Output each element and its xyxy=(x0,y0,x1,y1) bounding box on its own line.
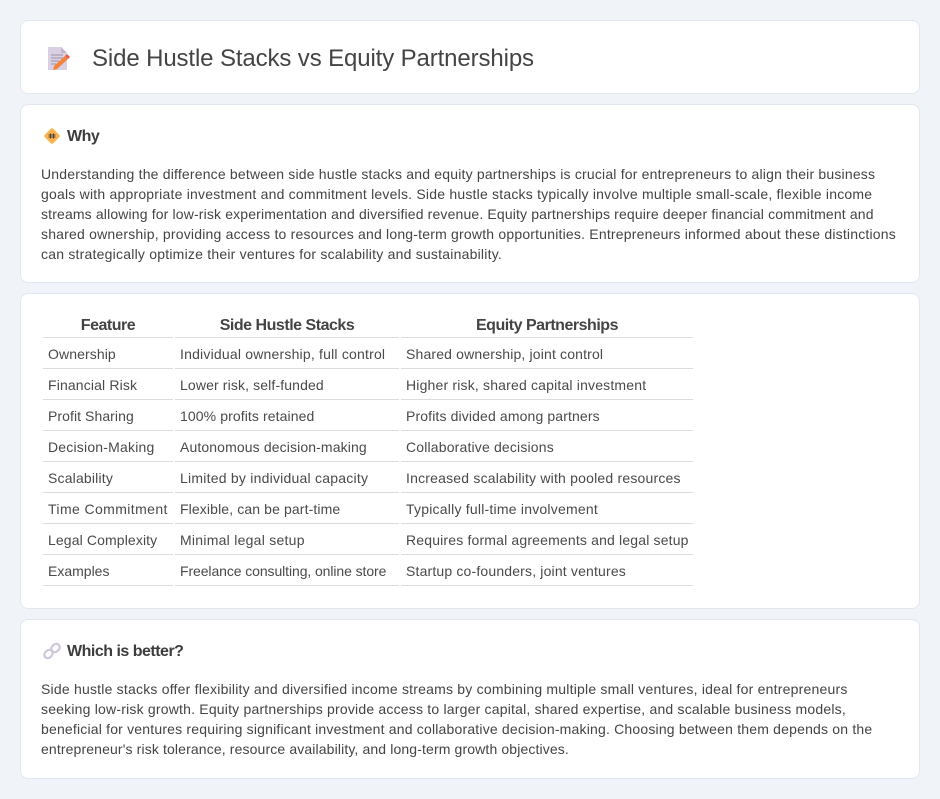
row: financial risk: Financial Risk xyxy=(48,377,137,393)
text: which is better paragraph: beneficial for ventures requiring significant investment and collaborative decision-making. Choosing between them depends on the xyxy=(41,721,872,737)
table header: side hustle stacks: Side Hustle Stacks xyxy=(220,317,354,334)
table: comparison: Increased scalability with pooled resources xyxy=(406,470,681,486)
table: comparison: Profits divided among partners xyxy=(406,408,600,424)
row: legal complexity: Legal Complexity xyxy=(48,532,157,548)
panel: header xyxy=(20,20,920,94)
panel: which is better xyxy=(20,619,920,779)
title: Side Hustle Stacks vs Equity Partnerships xyxy=(92,45,534,72)
row: profit sharing: Profit Sharing xyxy=(48,408,134,424)
row: ownership: Ownership xyxy=(48,346,116,362)
table: comparison: Freelance consulting, online store xyxy=(180,563,386,579)
text: why paragraph: can strategically optimize their ventures for scalability and sustainability. xyxy=(41,246,502,262)
table: comparison: Flexible, can be part-time xyxy=(180,501,340,517)
icon: link xyxy=(43,642,61,660)
text: why paragraph xyxy=(41,166,896,262)
text: why paragraph: shared ownership, providing access to resources and long-term growth opportunities. Entrepreneurs informed about these distinctions xyxy=(41,226,896,242)
table: comparison: Lower risk, self-funded xyxy=(180,377,324,393)
table header: feature: Feature xyxy=(81,317,135,334)
table: comparison: Typically full-time involvement xyxy=(406,501,598,517)
row: decision-making: Decision-Making xyxy=(48,439,154,455)
table: comparison xyxy=(43,317,693,586)
table header: equity partnerships: Equity Partnerships xyxy=(476,317,618,334)
table: comparison: Minimal legal setup xyxy=(180,532,305,548)
text: why paragraph: streams allowing for low-risk experimentation and diversified revenue. Equity partnerships require deeper financial commitment and xyxy=(41,206,874,222)
table: comparison: Higher risk, shared capital investment xyxy=(406,377,646,393)
icon: warning diamond xyxy=(44,128,60,144)
table: comparison: Shared ownership, joint control xyxy=(406,346,603,362)
text: which is better paragraph xyxy=(41,681,872,757)
text: which is better paragraph: entrepreneur's risk tolerance, resource availability, and long-term growth objectives. xyxy=(41,741,569,757)
row: examples: Examples xyxy=(48,563,109,579)
text: why paragraph: Understanding the difference between side hustle stacks and equity partnerships is crucial for entrepreneurs to align their business xyxy=(41,166,875,182)
text: why paragraph: goals with appropriate investment and commitment levels. Side hustle stacks typically involve multiple small-scale, flexible income xyxy=(41,186,872,202)
table: comparison: Requires formal agreements and legal setup xyxy=(406,532,689,548)
panel: comparison table xyxy=(20,293,920,609)
table: comparison: Individual ownership, full control xyxy=(180,346,385,362)
heading: which is better: Which is better? xyxy=(67,643,183,660)
table: comparison: 100% profits retained xyxy=(180,408,314,424)
table: comparison: Collaborative decisions xyxy=(406,439,554,455)
row: time commitment: Time Commitment xyxy=(48,501,168,517)
text: which is better paragraph: Side hustle stacks offer flexibility and diversified income streams by combining multiple small ventures, ideal for entrepreneurs xyxy=(41,681,848,697)
panel: why xyxy=(20,104,920,283)
text: which is better paragraph: seeking low-risk growth. Equity partnerships provide access to larger capital, shared expertise, and scalable business models, xyxy=(41,701,846,717)
icon: memo with pencil xyxy=(48,47,70,70)
row: scalability: Scalability xyxy=(48,470,113,486)
table: comparison: Startup co-founders, joint ventures xyxy=(406,563,626,579)
table: comparison: Limited by individual capacity xyxy=(180,470,368,486)
table: comparison: Autonomous decision-making xyxy=(180,439,367,455)
heading: why: Why xyxy=(67,128,99,145)
